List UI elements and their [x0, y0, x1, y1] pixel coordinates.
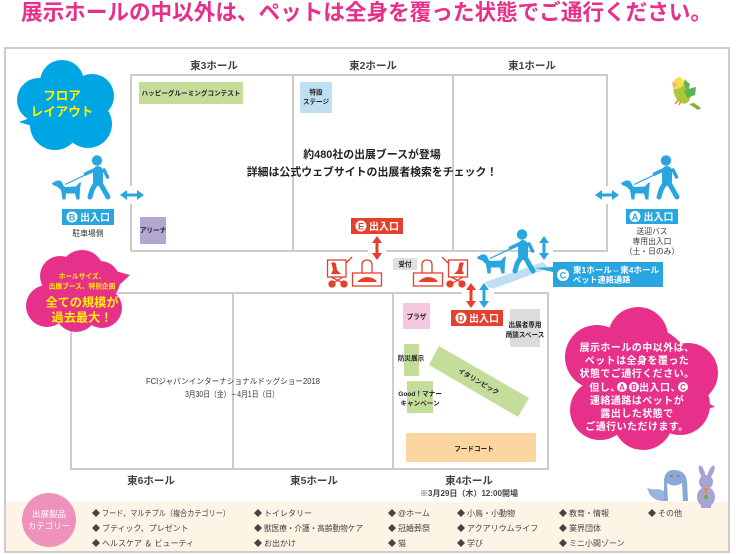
- category list: 冠婚葬祭: [398, 523, 430, 533]
- category list: お出かけ: [264, 538, 296, 548]
- badge: entrance B: B: [69, 212, 76, 222]
- category list: [92, 508, 682, 548]
- category list: @ホーム: [398, 509, 430, 518]
- arrow: entrance B two-way: [120, 186, 144, 204]
- category list: 教育・情報: [569, 508, 609, 518]
- badge: entrance E: E: [358, 222, 364, 232]
- text block: FCI dog show: 3月30日（金）－4月1日（日）: [185, 389, 279, 399]
- panel: lower halls floor plan: [71, 293, 548, 469]
- category list: トイレタリー: [264, 509, 312, 518]
- cloud: exposure rule notice: ペットは全身を覆った: [585, 354, 689, 367]
- icon: pet cart right: [442, 257, 468, 287]
- category list: 猫: [398, 538, 406, 548]
- hall label: east 5: 東5ホール: [290, 474, 338, 487]
- text block: exhibitor count: [247, 147, 497, 178]
- badge: entrance E: [351, 218, 403, 234]
- badge: entrance A: A: [632, 212, 639, 222]
- panel: product category band: [6, 493, 728, 551]
- booth: arena: [140, 217, 167, 244]
- label: reception: 受付: [398, 260, 412, 268]
- booth: italinpic: イタリンピック: [457, 366, 501, 397]
- booth: exhibitor sales space: 商談スペース: [506, 330, 545, 339]
- category list: 獣医療・介護・高齢動物ケア: [264, 523, 363, 533]
- booth: italinpic: [429, 346, 529, 417]
- cloud: exposure rule notice: C: [680, 383, 686, 392]
- icon: cat: [647, 470, 688, 501]
- cloud: largest ever scale: ホールサイズ、: [59, 272, 105, 280]
- cloud: exposure rule notice: ご通行いただけます。: [585, 420, 689, 433]
- category list: 業界団体: [569, 523, 601, 533]
- booth: disaster prevention: [398, 344, 425, 376]
- icon: rabbit: [697, 465, 716, 508]
- booth: exhibitor sales space: 出展者専用: [509, 320, 541, 329]
- booth: good manner campaign: キャンペーン: [400, 400, 440, 408]
- icon: walker with dog, entrance A: [621, 155, 677, 200]
- booth: food court: フードコート: [454, 445, 494, 453]
- cloud: exposure rule notice: [565, 307, 718, 450]
- icon: walker with dog, corridor: [477, 229, 533, 274]
- cloud: largest ever scale: 全ての規模が: [45, 294, 119, 310]
- cloud: largest ever scale: 出展ブース、特別企画: [49, 282, 116, 290]
- cloud: floor layout: [17, 60, 114, 150]
- cloud: largest ever scale: 過去最大！: [52, 310, 112, 324]
- booth: good manner campaign: [398, 381, 442, 413]
- category list: ブティック、プレゼント: [102, 523, 189, 533]
- panel: product category band: 出展製品: [32, 509, 66, 519]
- callout: corridor C: 東1ホール⇔東4ホール: [573, 265, 659, 275]
- icon: walker with dog, entrance B: [52, 155, 108, 200]
- booth: plaza: プラザ: [407, 312, 427, 321]
- booth: arena: アリーナ: [140, 226, 167, 234]
- badge: entrance D: 出入口: [469, 312, 499, 325]
- arrow: entrance A two-way: [595, 186, 619, 204]
- callout: corridor C: [535, 262, 663, 287]
- east 4 opening note: ※3月29日（木）12:00開場: [420, 488, 518, 498]
- text block: FCI dog show: [146, 376, 320, 399]
- icon: pet carrier bag left: [352, 260, 382, 286]
- category list: ミニ小間ゾーン: [569, 539, 625, 548]
- booth: plaza: [403, 303, 430, 329]
- badge: entrance A: [626, 209, 678, 224]
- note: shuttle bus entrance: 専用出入口: [633, 236, 671, 246]
- badge: entrance E: 出入口: [369, 220, 399, 233]
- cloud: exposure rule notice: 状態でご通行ください。: [580, 367, 694, 380]
- label: reception: [393, 258, 417, 270]
- cloud: largest ever scale: [26, 250, 130, 332]
- cloud: floor layout: レイアウト: [31, 105, 93, 119]
- text block: FCI dog show: FCIジャパンインターナショナルドッグショー2018: [146, 376, 320, 386]
- hall label: east 1: 東1ホール: [508, 59, 556, 72]
- cloud: exposure rule notice: 但し、: [589, 382, 621, 394]
- note: shuttle bus entrance: （土・日のみ）: [625, 246, 679, 256]
- icon: pet carrier bag right: [414, 260, 442, 286]
- booth: special stage: [300, 82, 332, 113]
- badge: entrance D: [451, 310, 503, 326]
- hall label: east 2: 東2ホール: [349, 59, 397, 72]
- cloud: exposure rule notice: A: [619, 383, 625, 392]
- panel: product category band: カテゴリー: [28, 521, 70, 531]
- arrow: entrance E two-way: [368, 236, 386, 260]
- icon: pet cart left: [328, 257, 352, 287]
- category list: その他: [658, 508, 682, 518]
- booth: disaster prevention: 防災展示: [398, 354, 425, 362]
- booth: special stage: 特設: [309, 88, 323, 96]
- note: shuttle bus entrance: 送迎バス: [636, 226, 668, 236]
- callout: corridor C: ペット連絡通路: [573, 274, 631, 284]
- icon: parrot: [670, 77, 701, 110]
- badge: entrance D: D: [458, 314, 465, 324]
- note: parking side: 駐車場側: [72, 228, 104, 238]
- cloud: exposure rule notice: 展示ホールの中以外は、: [580, 341, 694, 354]
- arrow: entrance D red two-way: [462, 283, 494, 308]
- note: shuttle bus entrance: [625, 226, 679, 256]
- cloud: exposure rule notice: 連絡通路はペットが: [590, 394, 684, 407]
- callout: corridor C: C: [560, 270, 567, 280]
- category list: 学び: [467, 538, 483, 548]
- badge: entrance B: [62, 209, 114, 225]
- page title: 展示ホールの中以外は、ペットは全身を覆った状態でご通行ください。: [21, 0, 712, 25]
- category list: アクアリウムライフ: [467, 524, 538, 533]
- booth: special stage: ステージ: [303, 98, 330, 106]
- booth: exhibitor sales space: [506, 309, 545, 347]
- badge: entrance A: 出入口: [644, 210, 674, 224]
- panel: upper halls floor plan: [131, 75, 607, 251]
- booth: good manner campaign: Good！マナー: [398, 390, 442, 398]
- category list: ヘルスケア ＆ ビューティ: [102, 539, 194, 548]
- arrow: entrance D blue two-way: [479, 283, 489, 308]
- text block: exhibitor count: 約480社の出展ブースが登場: [303, 147, 441, 161]
- cloud: exposure rule notice: 出入口、: [639, 381, 681, 394]
- hall label: east 4: 東4ホール: [445, 474, 493, 487]
- booth: food court: [406, 433, 536, 462]
- corridor: light blue connecting path: [485, 262, 549, 290]
- category list: 小鳥・小動物: [467, 508, 515, 518]
- cloud: floor layout: フロア: [43, 89, 81, 103]
- arrow: hall 1 corridor two-way: [535, 236, 553, 260]
- booth: happy grooming contest: ハッピーグルーミングコンテスト: [142, 88, 240, 98]
- category list: フード、マルチプル（複合カテゴリー）: [102, 508, 230, 518]
- booth: happy grooming contest: [139, 82, 243, 104]
- cloud: exposure rule notice: 露出した状態で: [600, 407, 674, 420]
- hall label: east 3: 東3ホール: [190, 59, 238, 72]
- badge: entrance B: 出入口: [80, 211, 110, 224]
- text block: exhibitor count: 詳細は公式ウェブサイトの出展者検索をチェック！: [247, 164, 497, 178]
- cloud: exposure rule notice: B: [631, 383, 637, 392]
- hall label: east 6: 東6ホール: [127, 474, 175, 487]
